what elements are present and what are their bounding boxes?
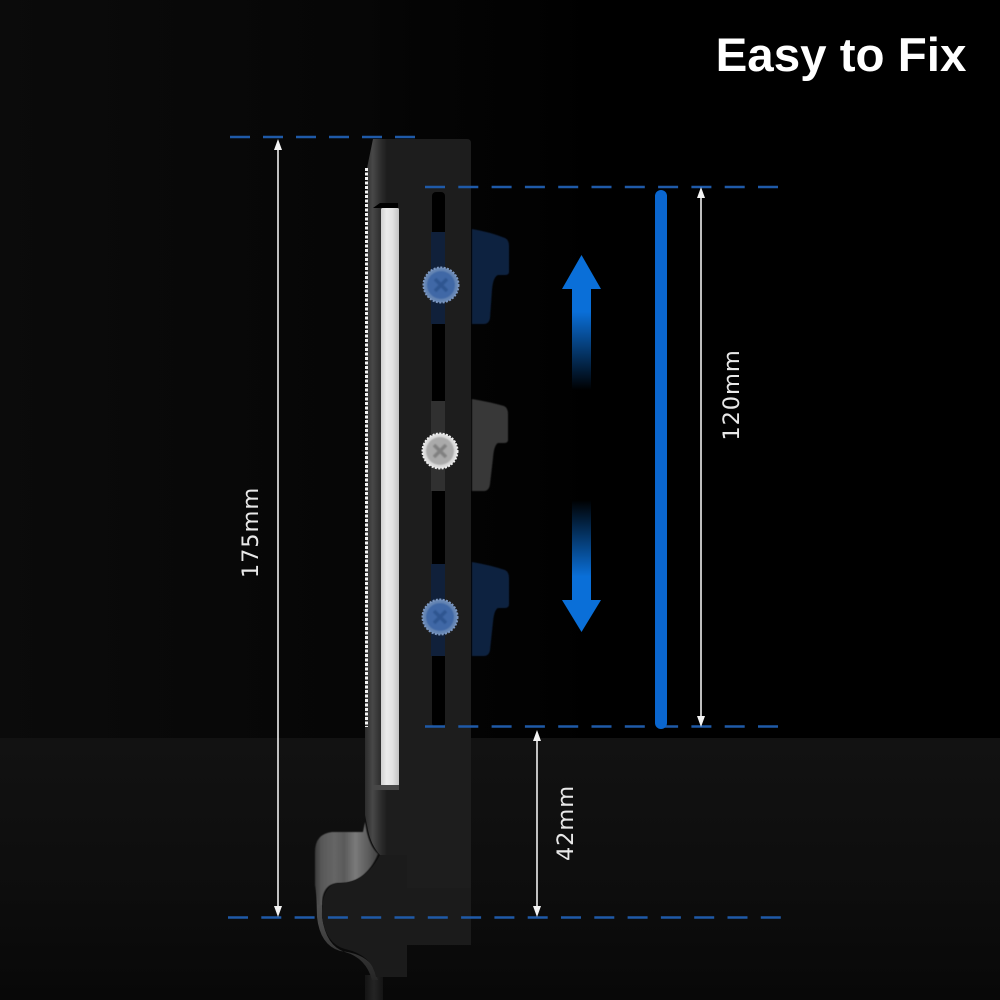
T-shaped foot	[322, 855, 471, 977]
dimension arrow 120mm	[697, 187, 705, 727]
dashed guide: bottom 175mm	[228, 916, 782, 919]
dimension label 120mm: 120mm	[719, 349, 745, 441]
dimension label 175mm: 175mm	[238, 487, 264, 578]
dimension arrow 42mm	[533, 730, 541, 917]
thumb screw	[424, 268, 458, 302]
thumb screw	[422, 434, 458, 468]
left spine	[365, 139, 387, 855]
upper clip (blue)	[424, 229, 509, 324]
serrated edge	[365, 168, 368, 727]
LED strip end cap	[373, 785, 399, 790]
dashed guide: top 175mm	[230, 136, 416, 138]
lower grip lower edge	[316, 880, 378, 980]
LED strip shadow	[373, 203, 398, 208]
lower grip lit shoulder	[315, 822, 378, 905]
title: Easy to Fix	[716, 29, 967, 82]
dashed guide: top 120mm	[425, 186, 780, 188]
middle clip (grey)	[422, 399, 508, 491]
mounting slot	[432, 192, 445, 727]
device: side profile of the bracket	[315, 139, 471, 1000]
back plate	[376, 139, 471, 888]
dashed guide: bottom 120mm	[425, 725, 780, 728]
dimension arrow 175mm	[274, 139, 282, 917]
blue rail bar	[655, 190, 667, 729]
dimension label 42mm: 42mm	[553, 785, 579, 861]
thumb screw	[422, 600, 458, 634]
adjustment arrow up	[562, 255, 601, 390]
adjustment arrow down	[562, 500, 601, 632]
LED strip	[381, 208, 399, 786]
lower stem	[365, 975, 383, 1000]
lower clip (blue)	[422, 562, 509, 656]
